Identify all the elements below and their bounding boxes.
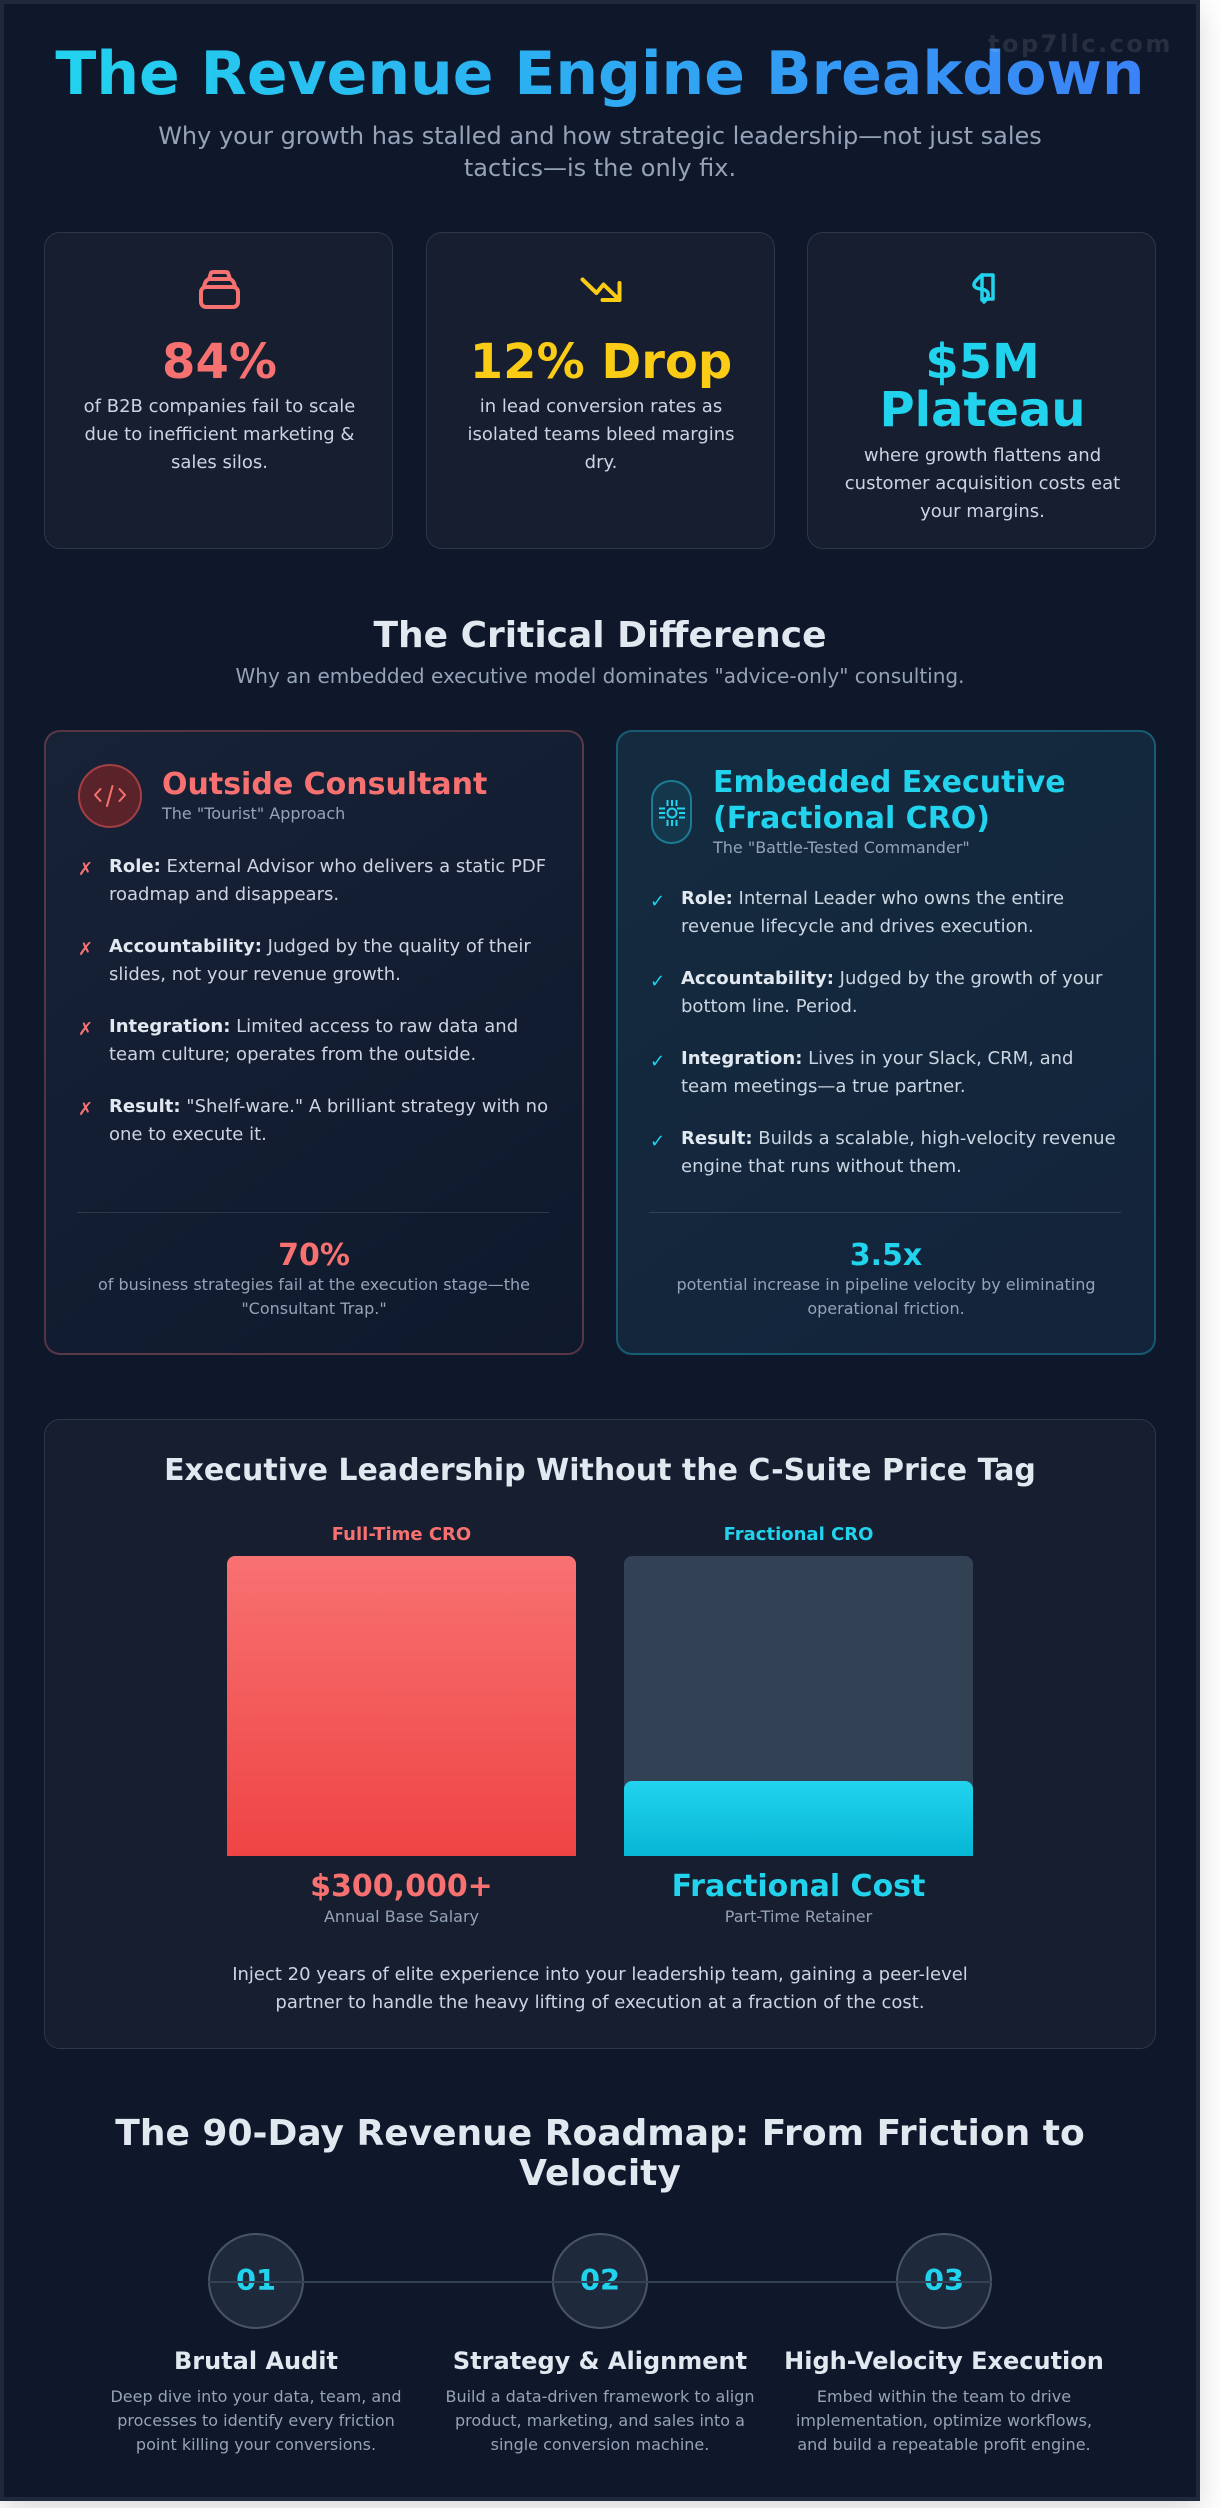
step 3 title: High-Velocity Execution — [784, 2347, 1104, 2375]
panel tagline: The "Battle-Tested Commander" — [713, 838, 970, 857]
stat value — [879, 334, 1086, 438]
heading: roadmap: Velocity — [519, 2153, 681, 2194]
panel tagline: The "Tourist" Approach — [162, 804, 345, 823]
step 2 title: Strategy & Alignment — [453, 2347, 747, 2375]
item: accountability: ✓ — [650, 971, 665, 992]
description — [467, 396, 735, 473]
stat value: 12% Drop — [470, 334, 732, 390]
stat value: Plateau — [879, 382, 1086, 438]
panel: outside consultant — [44, 730, 584, 1355]
icon: cpu chip — [651, 780, 692, 844]
item: integration: ✗ — [78, 1019, 93, 1040]
item: accountability — [650, 968, 1102, 1017]
heading: Executive Leadership Without the C-Suite Price Tag — [164, 1453, 1036, 1488]
step 2 description: Build a data-driven framework to align — [445, 2387, 755, 2406]
item: accountability: Accountability: Judged by the quality of their — [109, 936, 531, 957]
description: in lead conversion rates as — [480, 396, 722, 417]
stat note: "Consultant Trap." — [241, 1299, 387, 1318]
icon: stack — [199, 270, 240, 309]
item: role: roadmap and disappears. — [109, 884, 339, 905]
subtitle — [158, 122, 1042, 182]
item: result: ✗ — [78, 1099, 93, 1120]
item: role — [78, 856, 546, 905]
bar value: $300,000+ — [310, 1869, 493, 1904]
item: role — [650, 888, 1064, 937]
section subtitle: Why an embedded executive model dominates "advice-only" consulting. — [236, 664, 964, 688]
heading: the critical difference: The Critical Difference — [373, 615, 827, 656]
step 2 description: single conversion machine. — [491, 2435, 709, 2454]
item: role: revenue lifecycle and drives execution. — [681, 916, 1034, 937]
description: sales silos. — [171, 452, 268, 473]
step 1 title: Brutal Audit — [174, 2347, 338, 2375]
bar — [227, 1556, 576, 1856]
subtitle: tactics—is the only fix. — [464, 154, 736, 182]
bar chart: fractional CRO — [624, 1524, 973, 1926]
stat value: $5M — [925, 334, 1040, 390]
watermark: top7llc.com — [988, 30, 1173, 58]
stat: 3.5x: 3.5x — [850, 1238, 922, 1273]
item: result: ✓ — [650, 1131, 665, 1152]
step 3 description: implementation, optimize workflows, — [796, 2411, 1092, 2430]
step 2 description: product, marketing, and sales into a — [455, 2411, 745, 2430]
item: integration: ✓ — [650, 1051, 665, 1072]
heading: roadmap — [115, 2113, 1085, 2194]
description: customer acquisition costs eat — [845, 473, 1120, 494]
heading: roadmap: The 90-Day Revenue Roadmap: From Friction to — [115, 2113, 1085, 2154]
bar caption: Annual Base Salary — [324, 1907, 479, 1926]
step 3 description — [796, 2387, 1092, 2454]
list: consultant traits — [78, 856, 548, 1145]
icon: trending down — [580, 277, 622, 302]
description — [84, 396, 355, 473]
panel heading — [713, 765, 1066, 836]
item: result — [78, 1096, 548, 1145]
item: integration: Integration: Lives in your Slack, CRM, and — [681, 1048, 1073, 1069]
bar chart: full-time CRO — [227, 1524, 576, 1926]
item: result: engine that runs without them. — [681, 1156, 962, 1177]
description: isolated teams bleed margins — [467, 424, 735, 445]
bar fill — [624, 1781, 973, 1856]
panel: stat $5M plateau — [807, 232, 1156, 549]
bar track and fill — [624, 1556, 973, 1856]
description: due to inefficient marketing & — [85, 424, 354, 445]
panel heading: Outside Consultant — [162, 767, 487, 802]
item: result: one to execute it. — [109, 1124, 267, 1145]
stat note — [98, 1275, 530, 1318]
stat note — [676, 1275, 1096, 1318]
item: role: ✓ — [650, 891, 665, 912]
description: where growth flattens and — [864, 445, 1101, 466]
bar label: Fractional CRO — [724, 1524, 873, 1545]
item: role: Role: External Advisor who delivers a static PDF — [109, 856, 546, 877]
step 1 circle — [208, 2233, 304, 2329]
item: role: Role: Internal Leader who owns the entire — [681, 888, 1064, 909]
step 2 circle — [552, 2233, 648, 2329]
panel heading: Embedded Executive — [713, 765, 1066, 800]
stat value: 84% — [162, 334, 277, 390]
step 1 number: 01 — [236, 2263, 276, 2297]
paragraph: partner to handle the heavy lifting of execution at a fraction of the cost. — [275, 1992, 925, 2013]
item: integration: team culture; operates from the outside. — [109, 1044, 476, 1065]
item: accountability — [78, 936, 531, 985]
item: integration: team meetings—a true partner. — [681, 1076, 966, 1097]
description: your margins. — [920, 501, 1045, 522]
step 1 description: Deep dive into your data, team, and — [110, 2387, 402, 2406]
step 3 description: and build a repeatable profit engine. — [797, 2435, 1091, 2454]
item: accountability: bottom line. Period. — [681, 996, 858, 1017]
paragraph — [232, 1964, 968, 2013]
icon: dollar document — [972, 273, 995, 304]
paragraph: Inject 20 years of elite experience into your leadership team, gaining a peer-level — [232, 1964, 968, 1985]
subtitle: Why your growth has stalled and how strategic leadership—not just sales — [158, 122, 1042, 150]
item: result: Result: "Shelf-ware." A brilliant strategy with no — [109, 1096, 548, 1117]
item: result — [650, 1128, 1116, 1177]
panel: stat 12% drop — [426, 232, 774, 549]
item: role: ✗ — [78, 859, 93, 880]
item: integration — [650, 1048, 1073, 1097]
item: accountability: ✗ — [78, 939, 93, 960]
step 1 description: processes to identify every friction — [117, 2411, 395, 2430]
step 2 number: 02 — [580, 2263, 620, 2297]
item: accountability: slides, not your revenue growth. — [109, 964, 401, 985]
panel heading: (Fractional CRO) — [713, 801, 990, 836]
description — [845, 445, 1120, 522]
step 2 description — [445, 2387, 755, 2454]
panel: stat 84% — [44, 232, 393, 549]
item: result: Result: Builds a scalable, high-velocity revenue — [681, 1128, 1116, 1149]
description: dry. — [585, 452, 617, 473]
step 3 number: 03 — [924, 2263, 964, 2297]
step 1 description — [110, 2387, 402, 2454]
item: accountability: Accountability: Judged by the growth of your — [681, 968, 1102, 989]
bar value: Fractional Cost — [672, 1869, 925, 1904]
list: executive traits — [650, 888, 1116, 1177]
bar caption: Part-Time Retainer — [725, 1907, 872, 1926]
panel: embedded executive — [616, 730, 1156, 1355]
stat note: potential increase in pipeline velocity by eliminating — [676, 1275, 1096, 1294]
step 3 description: Embed within the team to drive — [817, 2387, 1071, 2406]
step 1 description: point killing your conversions. — [136, 2435, 376, 2454]
stat note: operational friction. — [807, 1299, 965, 1318]
title: The Revenue Engine Breakdown — [55, 39, 1145, 109]
description: of B2B companies fail to scale — [84, 396, 355, 417]
item: integration: Integration: Limited access to raw data and — [109, 1016, 518, 1037]
item: integration — [78, 1016, 518, 1065]
stat note: of business strategies fail at the execution stage—the — [98, 1275, 530, 1294]
bar label: Full-Time CRO — [332, 1524, 471, 1545]
panel: cost comparison — [44, 1419, 1156, 2049]
icon: code — [78, 764, 142, 828]
step 3 circle — [896, 2233, 992, 2329]
stat: 70%: 70% — [278, 1238, 350, 1273]
